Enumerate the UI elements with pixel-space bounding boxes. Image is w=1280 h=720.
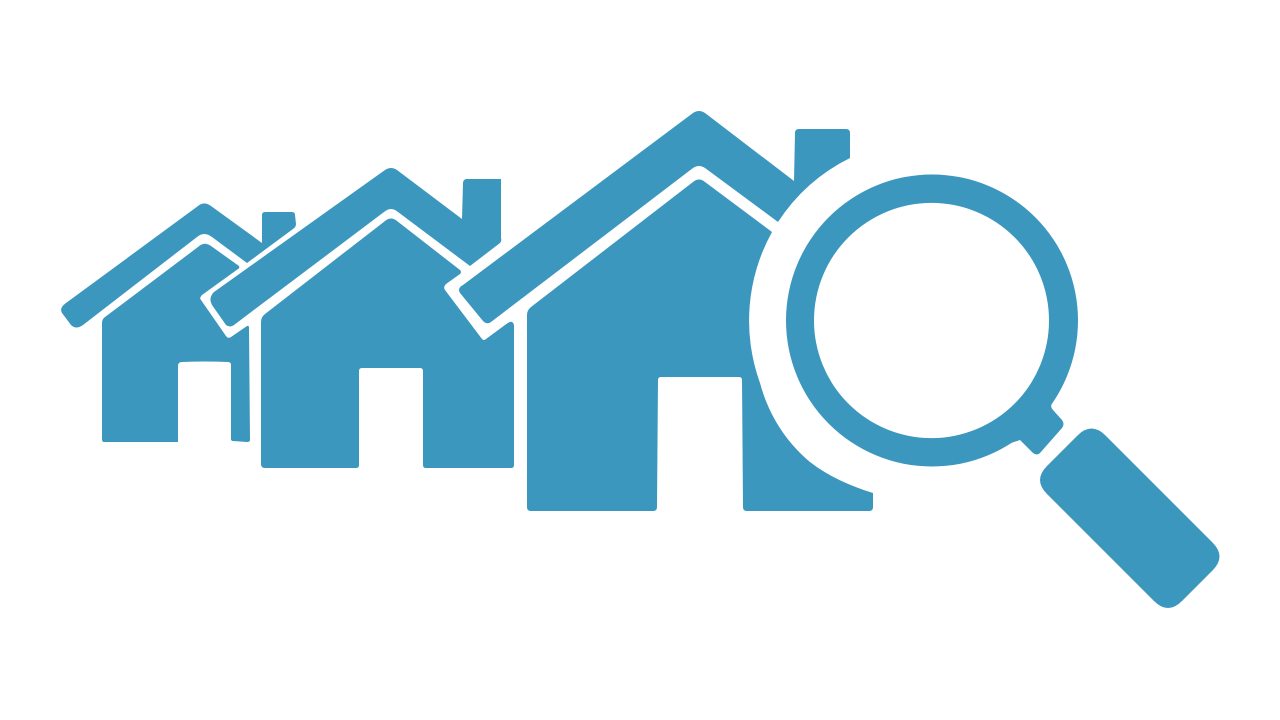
- icon: small house on the left: [61, 204, 296, 442]
- large house roof and chimney: [459, 111, 850, 323]
- middle house body with door: [261, 218, 514, 468]
- handle: [1040, 428, 1220, 608]
- middle house roof and chimney: [210, 168, 501, 326]
- icon: magnifying glass: [786, 174, 1220, 608]
- large house body with door: [527, 180, 873, 511]
- icon: large house: [459, 111, 873, 511]
- small house roof and chimney: [61, 204, 296, 328]
- lens ring: [786, 174, 1078, 466]
- small house body with door: [102, 244, 250, 442]
- icon: middle house: [210, 168, 514, 468]
- lens neck: [1005, 390, 1064, 454]
